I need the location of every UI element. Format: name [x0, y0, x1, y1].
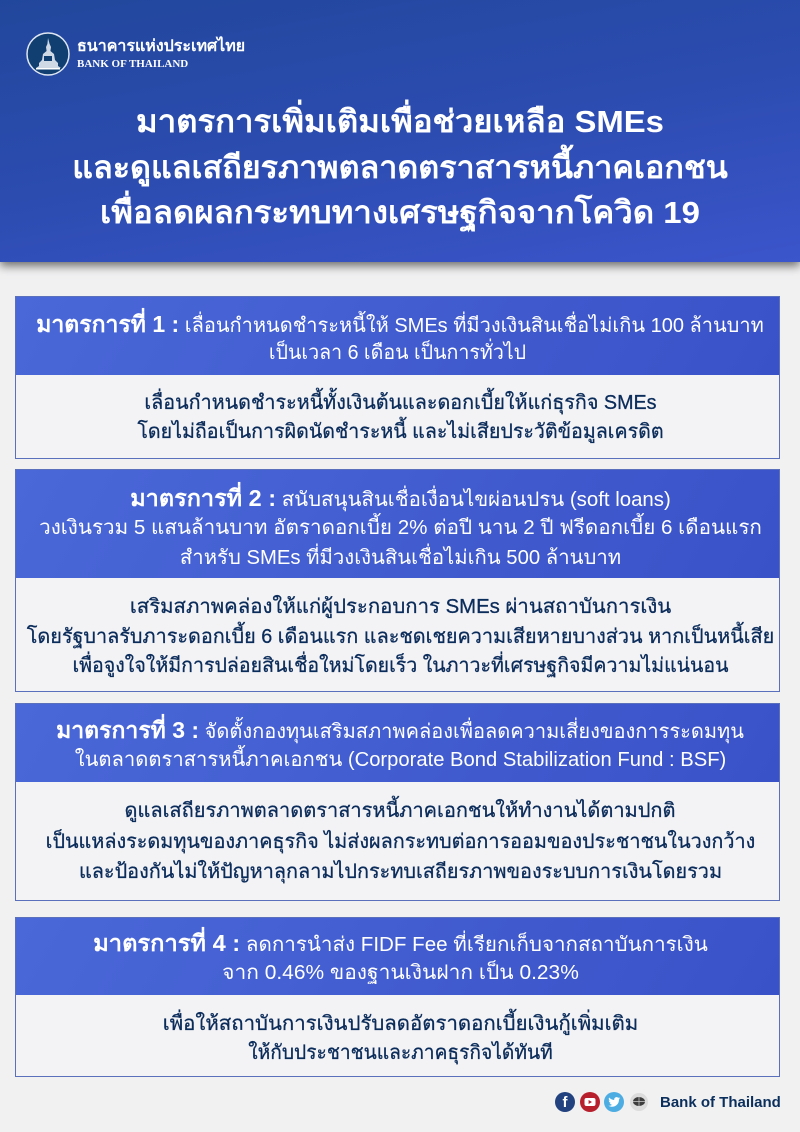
measure 3 details: และป้องกันไม่ให้ปัญหาลุกลามไปกระทบเสถียรภาพของระบบการเงินโดยรวม	[78, 861, 722, 883]
measure 4 heading: มาตรการที่ 4 : ลดการนำส่ง FIDF Fee ที่เรียกเก็บจากสถาบันการเงิน	[93, 930, 707, 956]
measure 1 details	[137, 388, 663, 444]
measure 3 heading: มาตรการที่ 3 : จัดตั้งกองทุนเสริมสภาพคล่องเพื่อลดความเสี่ยงของการระดมทุน	[56, 717, 744, 743]
measure 3 heading	[16, 704, 779, 782]
icon: facebook	[555, 1092, 575, 1112]
title: เพื่อลดผลกระทบทางเศรษฐกิจจากโควิด 19	[100, 195, 700, 230]
icon: twitter	[604, 1092, 624, 1112]
measure 2 heading	[16, 470, 779, 578]
measure 1 details: โดยไม่ถือเป็นการผิดนัดชำระหนี้ และไม่เสียประวัติข้อมูลเครดิต	[137, 421, 663, 443]
logo text: BANK OF THAILAND	[77, 58, 188, 70]
title: และดูแลเสถียรภาพตลาดตราสารหนี้ภาคเอกชน	[72, 150, 728, 185]
measure 2 heading: สำหรับ SMEs ที่มีวงเงินสินเชื่อไม่เกิน 500 ล้านบาท	[179, 547, 621, 569]
measure 2 heading: มาตรการที่ 2 : สนับสนุนสินเชื่อเงื่อนไขผ่อนปรน (soft loans)	[130, 485, 670, 511]
panel: measure 3	[15, 703, 780, 901]
measure 1 heading: มาตรการที่ 1 : เลื่อนกำหนดชำระหนี้ให้ SMEs ที่มีวงเงินสินเชื่อไม่เกิน 100 ล้านบาท	[36, 311, 764, 337]
title: มาตรการเพิ่มเติมเพื่อช่วยเหลือ SMEs	[136, 104, 664, 139]
icon: youtube	[580, 1092, 600, 1112]
measure 4 details	[162, 1008, 638, 1064]
measure 3 details: เป็นแหล่งระดมทุนของภาคธุรกิจ ไม่ส่งผลกระทบต่อการออมของประชาชนในวงกว้าง	[45, 831, 755, 853]
logo text: ธนาคารแห่งประเทศไทย	[77, 38, 245, 55]
measure 2 details: เพื่อจูงใจให้มีการปล่อยสินเชื่อใหม่โดยเร็ว ในภาวะที่เศรษฐกิจมีความไม่แน่นอน	[72, 655, 728, 677]
measure 4 heading: จาก 0.46% ของฐานเงินฝาก เป็น 0.23%	[222, 962, 578, 984]
measure 4 details: เพื่อให้สถาบันการเงินปรับลดอัตราดอกเบี้ยเงินกู้เพิ่มเติม	[162, 1013, 638, 1035]
measure 1 heading: เป็นเวลา 6 เดือน เป็นการทั่วไป	[269, 342, 526, 364]
logo: Bank of Thailand emblem	[26, 32, 70, 76]
measure 2 details: โดยรัฐบาลรับภาระดอกเบี้ย 6 เดือนแรก และชดเชยความเสียหายบางส่วน หากเป็นหนี้เสีย	[26, 626, 774, 648]
panel: measure 1	[15, 296, 780, 459]
icon: website	[630, 1093, 648, 1111]
measure 2 heading: วงเงินรวม 5 แสนล้านบาท อัตราดอกเบี้ย 2% ต่อปี นาน 2 ปี ฟรีดอกเบี้ย 6 เดือนแรก	[39, 517, 761, 539]
header banner	[0, 0, 800, 262]
measure 3 heading: ในตลาดตราสารหนี้ภาคเอกชน (Corporate Bond Stabilization Fund : BSF)	[74, 749, 726, 771]
icon: facebook: f	[562, 1094, 568, 1111]
measure 1 heading	[16, 297, 779, 375]
panel: measure 2	[15, 469, 780, 692]
measure 2 details: เสริมสภาพคล่องให้แก่ผู้ประกอบการ SMEs ผ่านสถาบันการเงิน	[129, 596, 671, 618]
measure 1 details: เลื่อนกำหนดชำระหนี้ทั้งเงินต้นและดอกเบี้ยให้แก่ธุรกิจ SMEs	[144, 392, 656, 414]
measure 4 heading	[16, 918, 779, 995]
measure 4 details: ให้กับประชาชนและภาคธุรกิจได้ทันที	[248, 1042, 552, 1064]
footer label: Bank of Thailand	[660, 1094, 781, 1111]
title	[72, 100, 728, 232]
panel: measure 4	[15, 917, 780, 1077]
measure 3 details	[45, 796, 755, 884]
measure 3 details: ดูแลเสถียรภาพตลาดตราสารหนี้ภาคเอกชนให้ทำงานได้ตามปกติ	[124, 800, 676, 822]
measure 2 details	[26, 594, 774, 678]
footer: social links	[555, 1092, 781, 1112]
logo text	[77, 36, 245, 70]
